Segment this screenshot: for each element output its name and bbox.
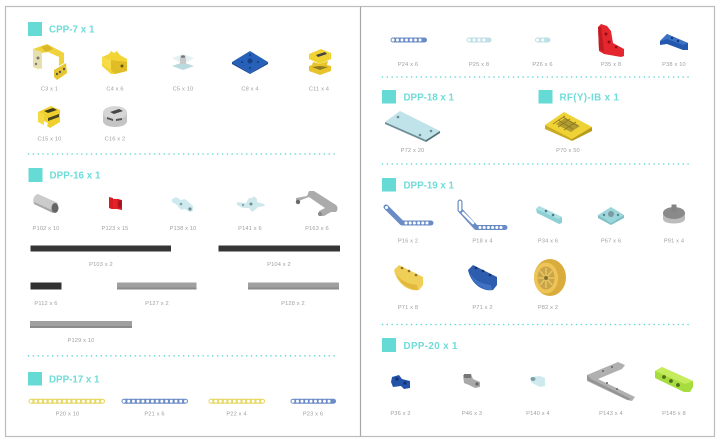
part: P18: P18 x 4: [472, 238, 493, 244]
part: P141: [237, 196, 265, 232]
part: P23: P23 x 6: [303, 412, 323, 418]
section: DPP-18: [382, 90, 455, 154]
section: DPP-20: [382, 338, 693, 417]
panel: left page: [28, 22, 340, 418]
section: DPP-16: [28, 168, 340, 344]
part: P82: [534, 259, 566, 311]
part: P24: [393, 40, 424, 68]
part: P16: [385, 206, 431, 244]
heading: DPP-20 x 1: DPP-20 x 1: [404, 341, 458, 352]
part: P70: P70 x 50: [556, 148, 580, 154]
part: P103: [30, 246, 171, 268]
part: P36: P36 x 2: [390, 411, 411, 417]
heading: DPP-17 x 1: DPP-17 x 1: [49, 374, 100, 386]
part: C8: C8 x 4: [241, 86, 259, 92]
part: C11: C11 x 4: [309, 86, 329, 92]
part: P102: [33, 194, 59, 232]
part: P16: P16 x 2: [398, 238, 418, 244]
section: RF(Y)-IB: [538, 90, 620, 154]
part: P22: [211, 401, 262, 418]
section: DPP-17: [28, 372, 334, 418]
part: P82: P82 x 2: [538, 305, 558, 311]
part: P163: P163 x 6: [305, 226, 329, 232]
part: P71 yellow: [394, 265, 423, 311]
part: P35: [598, 24, 624, 68]
part: P129: [30, 321, 132, 344]
part: P145: P145 x 8: [662, 411, 686, 417]
part: P38: P38 x 10: [662, 62, 686, 68]
part: P23: [293, 401, 334, 418]
part: P91: P91 x 4: [664, 238, 684, 244]
heading: DPP-16 x 1: [28, 168, 101, 182]
part: P72: P72 x 20: [401, 148, 424, 154]
heading: CPP-7 x 1: CPP-7 x 1: [49, 24, 95, 36]
part: P25: [469, 40, 489, 68]
section: DPP-17 continued: [393, 24, 688, 68]
part: P67: [598, 207, 624, 244]
part: P67: P67 x 6: [601, 238, 621, 244]
part: P71 yellow: P71 x 8: [398, 305, 418, 311]
part: P123: P123 x 15: [102, 226, 128, 232]
part: P127: [117, 282, 196, 307]
part: P128: [248, 282, 339, 307]
part: C16: [103, 106, 127, 142]
heading: DPP-20 x 1: [382, 338, 458, 352]
part: P112: P112 x 6: [34, 301, 58, 307]
part: P138: P138 x 10: [170, 226, 196, 232]
part: P46: [462, 374, 482, 417]
part: P26: P26 x 6: [532, 62, 553, 68]
part: P143: [587, 362, 635, 417]
heading: DPP-18 x 1: DPP-18 x 1: [404, 92, 455, 104]
part: P104: P104 x 2: [267, 262, 291, 268]
section: DPP-19: [382, 178, 685, 311]
part: C4: C4 x 6: [106, 86, 124, 92]
part: P21: [124, 401, 186, 418]
part: C15: [38, 106, 61, 142]
part: C11: [309, 49, 331, 92]
part: C4: [102, 51, 127, 92]
part: P46: P46 x 3: [462, 411, 482, 417]
part: P140: P140 x 4: [526, 411, 550, 417]
part: P38: [660, 34, 688, 68]
part: P18: [460, 202, 505, 244]
part: C3: C3 x 1: [41, 86, 58, 92]
part: P24: P24 x 6: [398, 62, 418, 68]
part: P140: [526, 376, 550, 417]
part: P35: P35 x 8: [601, 62, 621, 68]
part: C16: C16 x 2: [105, 136, 125, 142]
part: C5: C5 x 10: [173, 86, 193, 92]
part: P20: P20 x 10: [56, 412, 79, 418]
part: P26: [532, 40, 553, 68]
part: P34: P34 x 6: [538, 238, 558, 244]
part: C8: [232, 51, 268, 92]
part: P91: [663, 204, 685, 244]
heading: DPP-19 x 1: [382, 178, 455, 192]
part: P20: [31, 401, 102, 418]
part: P145: [655, 367, 693, 417]
part: P104: [218, 246, 340, 268]
part: P143: P143 x 4: [599, 411, 623, 417]
part: P25: P25 x 8: [469, 62, 489, 68]
part: P128: P128 x 2: [281, 301, 305, 307]
heading: DPP-16 x 1: DPP-16 x 1: [50, 170, 101, 182]
part: P71 blue: P71 x 2: [472, 305, 493, 311]
part: P138: [170, 197, 196, 232]
heading: RF(Y)-IB x 1: RF(Y)-IB x 1: [560, 92, 620, 104]
part: P103: P103 x 2: [89, 262, 113, 268]
part: P129: P129 x 10: [68, 338, 94, 344]
heading: CPP-7 x 1: [28, 22, 95, 36]
part: P21: P21 x 6: [144, 412, 165, 418]
part: P112: [30, 282, 62, 307]
part: C3: [33, 44, 67, 92]
part: P36: [390, 375, 411, 417]
part: P34: [536, 206, 562, 244]
panel: right page: [382, 24, 693, 417]
section: CPP-7: [28, 22, 331, 142]
part: P141: P141 x 6: [238, 226, 262, 232]
part: P127: P127 x 2: [145, 301, 169, 307]
part: P163: [296, 191, 338, 232]
heading: DPP-19 x 1: DPP-19 x 1: [404, 180, 455, 192]
part: C15: C15 x 10: [38, 136, 61, 142]
part: P71 blue: [468, 265, 497, 311]
part: P123: [102, 197, 128, 232]
heading: DPP-17 x 1: [28, 372, 100, 386]
part: P102: P102 x 10: [33, 226, 59, 232]
part: C5: [172, 54, 194, 92]
part: P22: P22 x 4: [226, 412, 247, 418]
